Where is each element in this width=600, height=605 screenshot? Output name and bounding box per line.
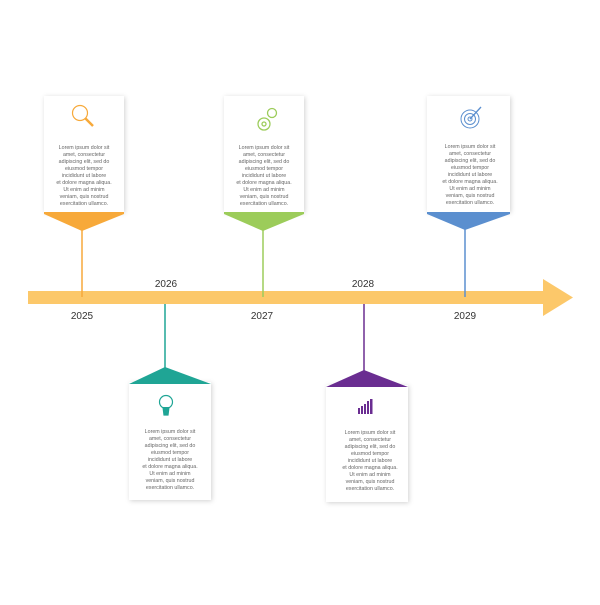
milestone 2029: Ut enim ad minim	[449, 186, 491, 192]
milestone 2026: et dolore magna aliqua.	[142, 464, 198, 470]
year 2028: 2028	[352, 279, 375, 290]
icon: chart	[358, 399, 372, 414]
milestone 2029: adipiscing elit, sed do	[445, 158, 495, 164]
icon: bulb	[160, 396, 172, 415]
milestone 2027: adipiscing elit, sed do	[239, 159, 289, 165]
milestone 2029	[427, 96, 510, 297]
milestone 2025: veniam, quis nostrud	[60, 194, 108, 200]
icon: target	[461, 107, 481, 128]
milestone 2027	[224, 96, 304, 297]
milestone 2026: veniam, quis nostrud	[146, 478, 194, 484]
milestone 2027: Lorem ipsum dolor sit	[239, 145, 290, 151]
milestone 2029: veniam, quis nostrud	[446, 193, 494, 199]
milestone 2028: adipiscing elit, sed do	[345, 444, 395, 450]
timeline arrow	[28, 279, 573, 316]
milestone 2027: amet, consectetur	[243, 152, 285, 158]
milestone 2029: Lorem ipsum dolor sit	[445, 144, 496, 150]
milestone 2027: incididunt ut labore	[242, 173, 286, 179]
milestone 2029: eiusmod tempor	[451, 165, 489, 171]
milestone 2026: Lorem ipsum dolor sit	[145, 429, 196, 435]
icon: gears	[258, 108, 276, 130]
milestone 2028: incididunt ut labore	[348, 458, 392, 464]
milestone 2026: incididunt ut labore	[148, 457, 192, 463]
milestone 2028: Lorem ipsum dolor sit	[345, 430, 396, 436]
milestone 2029: incididunt ut labore	[448, 172, 492, 178]
year 2026: 2026	[155, 279, 178, 290]
milestone 2026	[129, 304, 211, 500]
milestone 2025: eiusmod tempor	[65, 166, 103, 172]
milestone 2025: exercitation ullamco.	[60, 201, 108, 207]
milestone 2026: Ut enim ad minim	[149, 471, 191, 477]
milestone 2025: incididunt ut labore	[62, 173, 106, 179]
milestone 2026: amet, consectetur	[149, 436, 191, 442]
milestone 2028: et dolore magna aliqua.	[342, 465, 398, 471]
milestone 2026: adipiscing elit, sed do	[145, 443, 195, 449]
milestone 2028: Ut enim ad minim	[349, 472, 391, 478]
milestone 2028: exercitation ullamco.	[346, 486, 394, 492]
milestone 2027: exercitation ullamco.	[240, 201, 288, 207]
milestone 2026: eiusmod tempor	[151, 450, 189, 456]
milestone 2025: et dolore magna aliqua.	[56, 180, 112, 186]
milestone 2028: eiusmod tempor	[351, 451, 389, 457]
icon: magnifier	[72, 106, 93, 126]
milestone 2027: Ut enim ad minim	[243, 187, 285, 193]
milestone 2025: Lorem ipsum dolor sit	[59, 145, 110, 151]
year 2025: 2025	[71, 311, 94, 322]
milestone 2025: amet, consectetur	[63, 152, 105, 158]
milestone 2027: et dolore magna aliqua.	[236, 180, 292, 186]
milestone 2027: veniam, quis nostrud	[240, 194, 288, 200]
milestone 2029: amet, consectetur	[449, 151, 491, 157]
milestone 2025: Ut enim ad minim	[63, 187, 105, 193]
milestone 2029: exercitation ullamco.	[446, 200, 494, 206]
milestone 2028: amet, consectetur	[349, 437, 391, 443]
milestone 2028	[326, 304, 408, 502]
milestone 2029: et dolore magna aliqua.	[442, 179, 498, 185]
milestone 2025	[44, 96, 124, 297]
milestone 2028: veniam, quis nostrud	[346, 479, 394, 485]
year 2029: 2029	[454, 311, 477, 322]
milestone 2026: exercitation ullamco.	[146, 485, 194, 491]
milestone 2025: adipiscing elit, sed do	[59, 159, 109, 165]
year 2027: 2027	[251, 311, 274, 322]
milestone 2027: eiusmod tempor	[245, 166, 283, 172]
